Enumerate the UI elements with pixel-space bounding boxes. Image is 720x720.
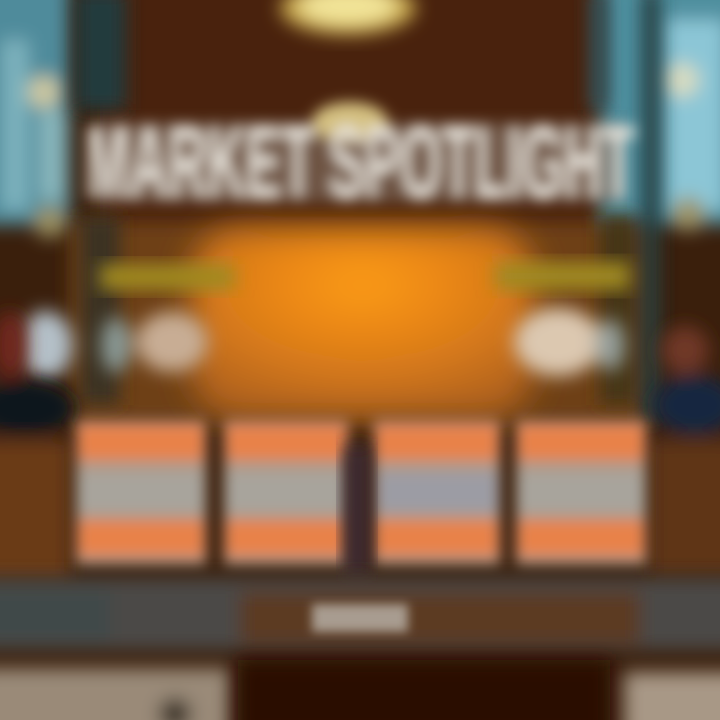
left window — [0, 0, 70, 238]
background: upper brown wall — [100, 0, 620, 240]
title banner — [85, 102, 635, 221]
center plaque — [312, 604, 408, 632]
lower counter — [0, 578, 720, 650]
right audience figure — [650, 326, 720, 575]
right subtitle — [495, 262, 630, 290]
panel: table column 2 — [224, 420, 348, 565]
floor left — [0, 668, 230, 720]
panel: table column 4 — [516, 420, 646, 565]
panel: table column 3 — [374, 420, 500, 565]
right window — [600, 0, 720, 231]
orange wall glow — [190, 228, 535, 418]
dark pillars — [76, 0, 660, 420]
podium base — [238, 660, 610, 720]
center divider post — [344, 445, 370, 575]
right portraits — [514, 308, 625, 376]
left portraits — [19, 311, 208, 379]
left audience figure — [0, 311, 75, 580]
ceiling lamp — [280, 0, 416, 35]
left subtitle — [100, 264, 235, 290]
panel: table column 1 — [76, 420, 206, 565]
background: middle wall — [70, 222, 650, 422]
floor right — [624, 672, 720, 720]
